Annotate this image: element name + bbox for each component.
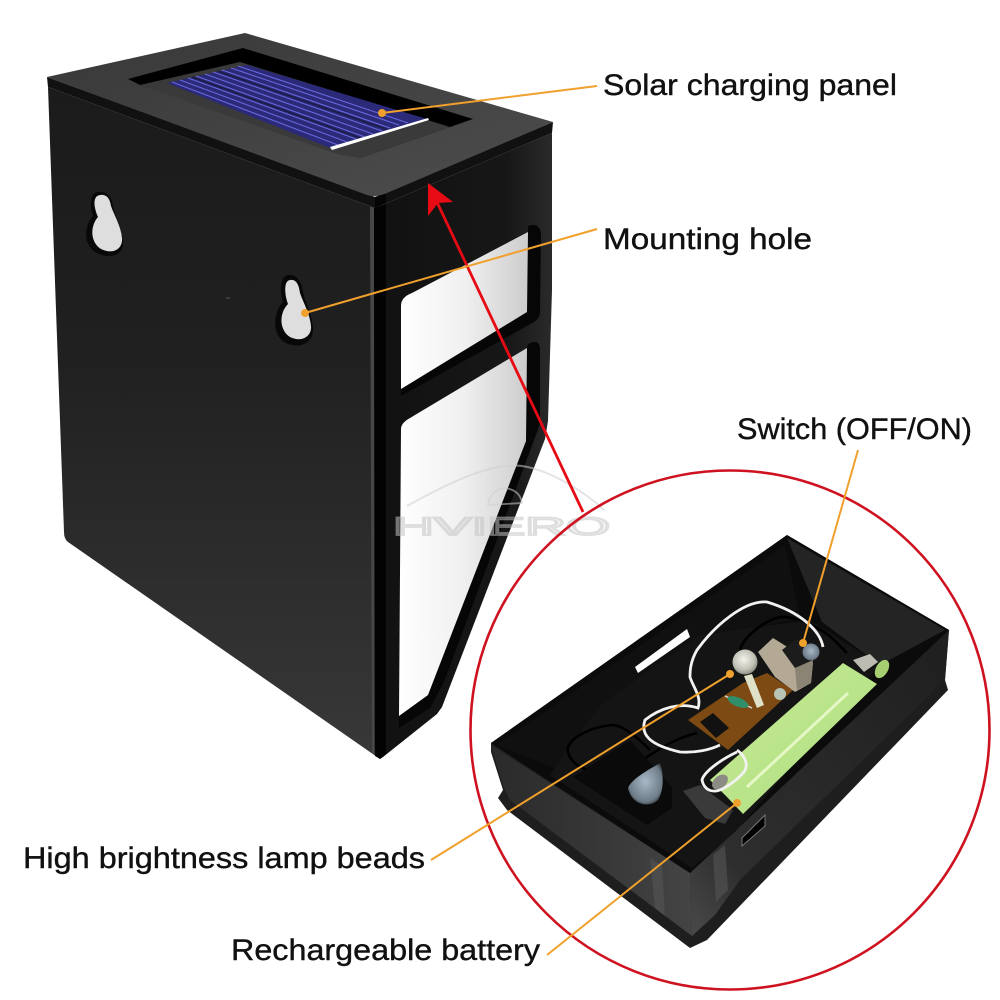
flange and outer walls — [491, 535, 949, 948]
red magnifier circle — [470, 470, 990, 990]
lamp window upper — [401, 225, 541, 396]
callout: switch: Switch (OFF/ON) — [737, 413, 972, 446]
callout: switch — [737, 413, 972, 647]
IC chip — [700, 713, 729, 738]
corner pillars — [650, 845, 728, 916]
far wall — [497, 545, 800, 770]
screw — [774, 688, 786, 700]
internal battery box — [491, 535, 949, 948]
lamp window lower — [399, 342, 540, 728]
callout: high brightness lamp beads: High brightness lamp beads — [23, 842, 425, 875]
battery terminal — [709, 772, 731, 792]
left near wall — [491, 745, 692, 936]
battery wire — [702, 750, 746, 791]
white panel strip — [330, 118, 429, 150]
black wires — [568, 617, 847, 770]
keyhole right — [275, 275, 313, 346]
box floor — [550, 620, 880, 868]
callout: rechargeable battery — [231, 799, 741, 967]
lid rim corner — [375, 193, 386, 208]
battery clip — [683, 785, 733, 824]
small mark — [226, 297, 230, 299]
lens dome — [628, 763, 663, 804]
corner band — [374, 204, 386, 759]
lid rim — [47, 77, 553, 208]
white wires — [644, 602, 823, 752]
solar recess floor — [140, 62, 450, 158]
LED bead — [732, 650, 758, 674]
keyhole left — [86, 192, 123, 256]
callout: mounting hole: Mounting hole — [603, 223, 812, 256]
callout: solar charging panel — [378, 69, 897, 117]
corner highlight strip — [370, 206, 374, 755]
battery slot on wall — [742, 815, 765, 846]
lens module — [573, 740, 672, 825]
left face — [48, 87, 380, 759]
solar lamp body — [47, 33, 553, 759]
solar recess — [128, 48, 473, 158]
right face — [375, 133, 552, 759]
callout: high brightness lamp beads — [23, 670, 734, 875]
lid top — [47, 33, 553, 196]
box interior — [491, 535, 949, 873]
callout: solar charging panel: Solar charging panel — [603, 69, 897, 102]
slide switch — [758, 638, 813, 692]
switch dome — [802, 644, 820, 660]
battery — [702, 654, 892, 814]
inductor — [725, 694, 752, 710]
callout: rechargeable battery: Rechargeable battery — [231, 934, 540, 967]
PCB — [688, 673, 793, 750]
callout: mounting hole — [301, 223, 812, 317]
solar panel — [167, 65, 429, 150]
wall slot — [635, 629, 690, 673]
watermark: HVIERO — [393, 513, 610, 541]
watermark — [393, 466, 610, 541]
right wall — [787, 538, 945, 665]
red pointer arrow — [428, 183, 583, 512]
LED post — [744, 674, 764, 708]
right near wall — [690, 630, 949, 936]
